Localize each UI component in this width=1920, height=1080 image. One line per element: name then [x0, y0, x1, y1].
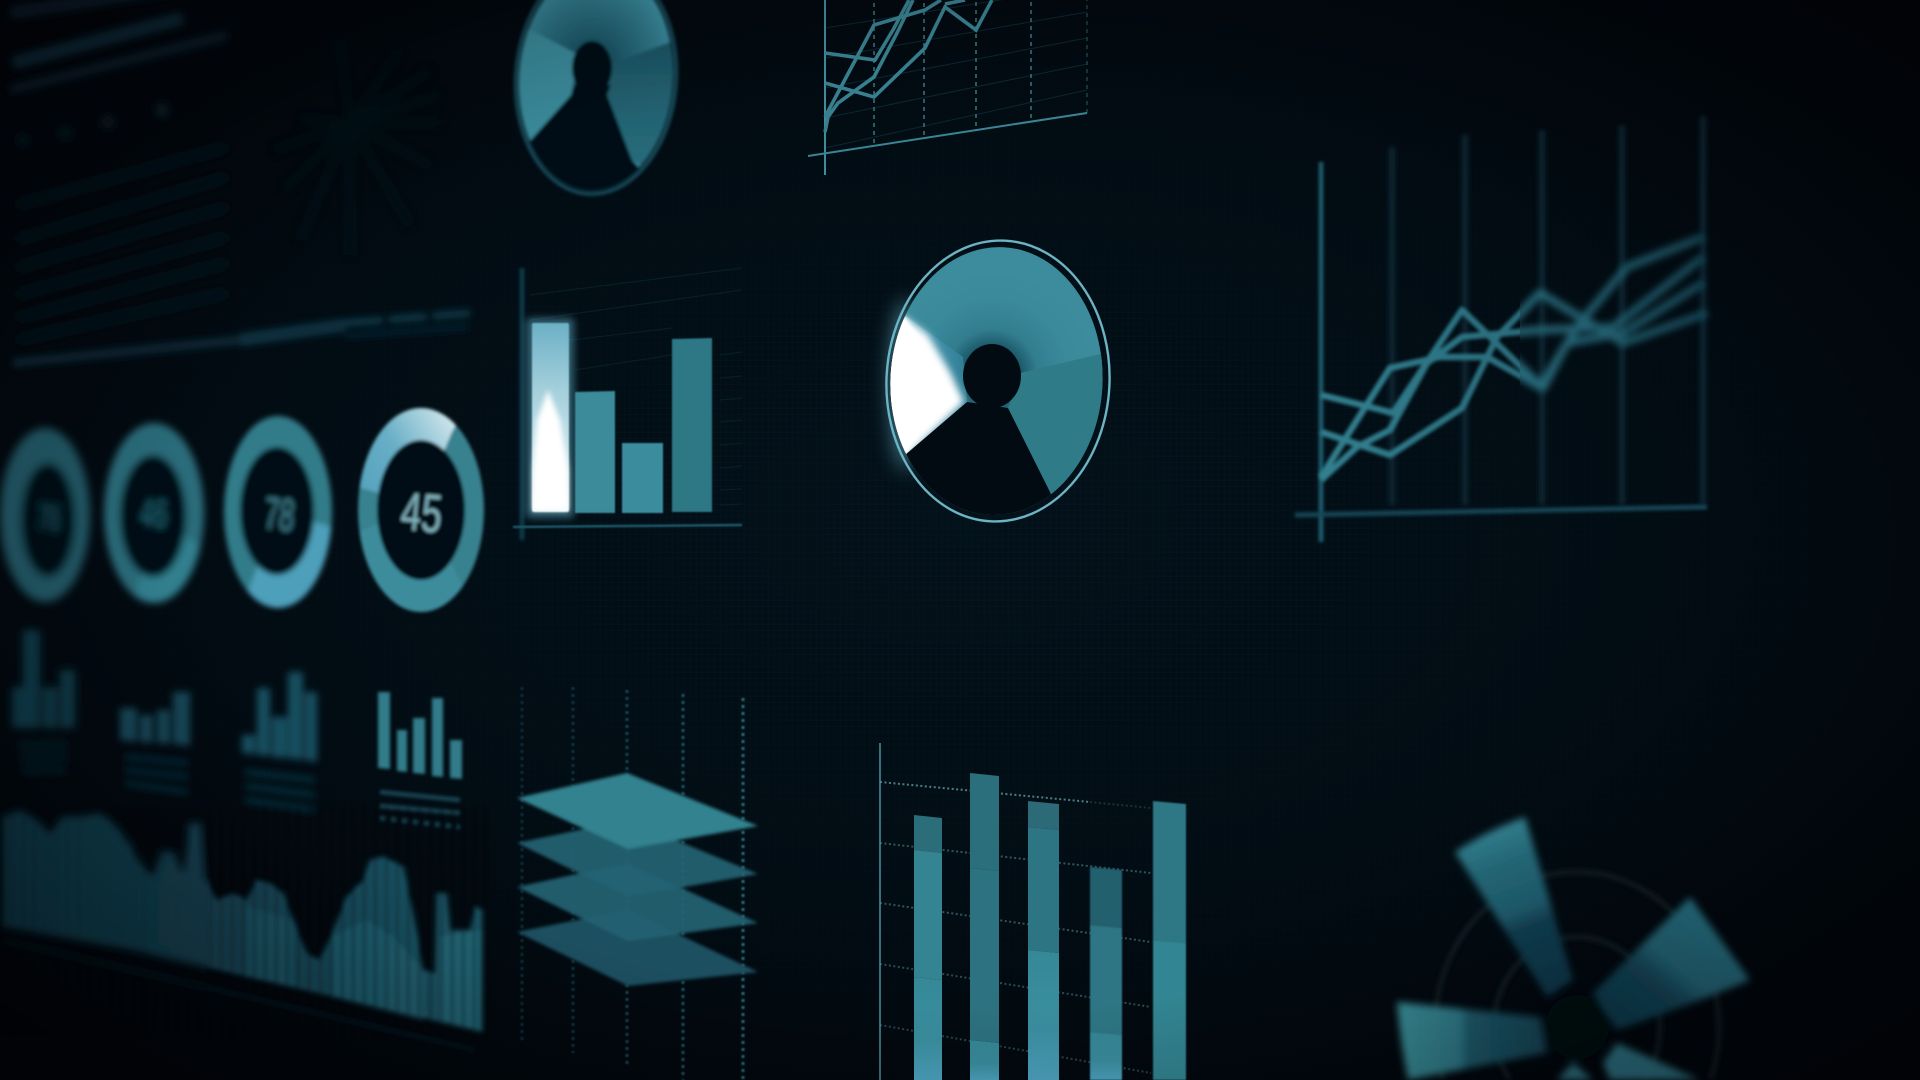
panel: small bar chart 4: [378, 692, 462, 827]
blade top: [1455, 817, 1573, 997]
bar 2: [575, 391, 615, 513]
bar highlighted: [526, 318, 574, 518]
panel: progress rings: [0, 408, 484, 612]
ring 76: [0, 428, 90, 602]
ring 78: [224, 416, 332, 608]
bar D: [1090, 867, 1122, 1080]
chart: large histogram: [0, 807, 487, 1050]
blade left: [1397, 1002, 1547, 1080]
panel: small bar chart 3: [242, 672, 317, 810]
ring 46: 46: [139, 490, 169, 536]
panel: small bar chart 1: [12, 630, 75, 770]
blade bottom right: [1603, 1043, 1700, 1080]
bar C: [1028, 801, 1059, 1080]
ring 45: 45: [399, 480, 445, 544]
ring 78: 78: [262, 487, 296, 541]
bar B: [970, 773, 999, 1080]
layer 2: [517, 820, 758, 897]
chart: stacked layers: [517, 687, 758, 1080]
blade right: [1593, 897, 1750, 1030]
bar 3: [622, 443, 663, 513]
layer 1: [517, 773, 758, 849]
panel: blurred header band: [13, 313, 470, 363]
ring 76: 76: [36, 497, 62, 539]
chart: right line chart: [1295, 116, 1707, 542]
panel: blurred text block top left: [10, 0, 227, 340]
panel: faint radial scatter: [275, 40, 440, 255]
ring 46: [104, 423, 204, 603]
bar A: [914, 815, 942, 1080]
ring 45: [358, 408, 484, 612]
blade bottom: [1557, 1063, 1593, 1080]
chart: top line chart: [808, 0, 1087, 175]
panel: small bar chart 2: [120, 692, 190, 792]
bar E: [1153, 801, 1186, 1080]
panel: top pie chart: [512, 0, 680, 198]
bar 4: [672, 338, 712, 512]
chart: middle bar chart: [513, 268, 742, 540]
layer 3: [517, 863, 758, 941]
chart: main pie chart: [876, 239, 1111, 523]
chart: tall stacked bar chart: [880, 743, 1186, 1080]
layer 4: [517, 910, 758, 986]
chart: radial fan chart: [1397, 817, 1750, 1080]
